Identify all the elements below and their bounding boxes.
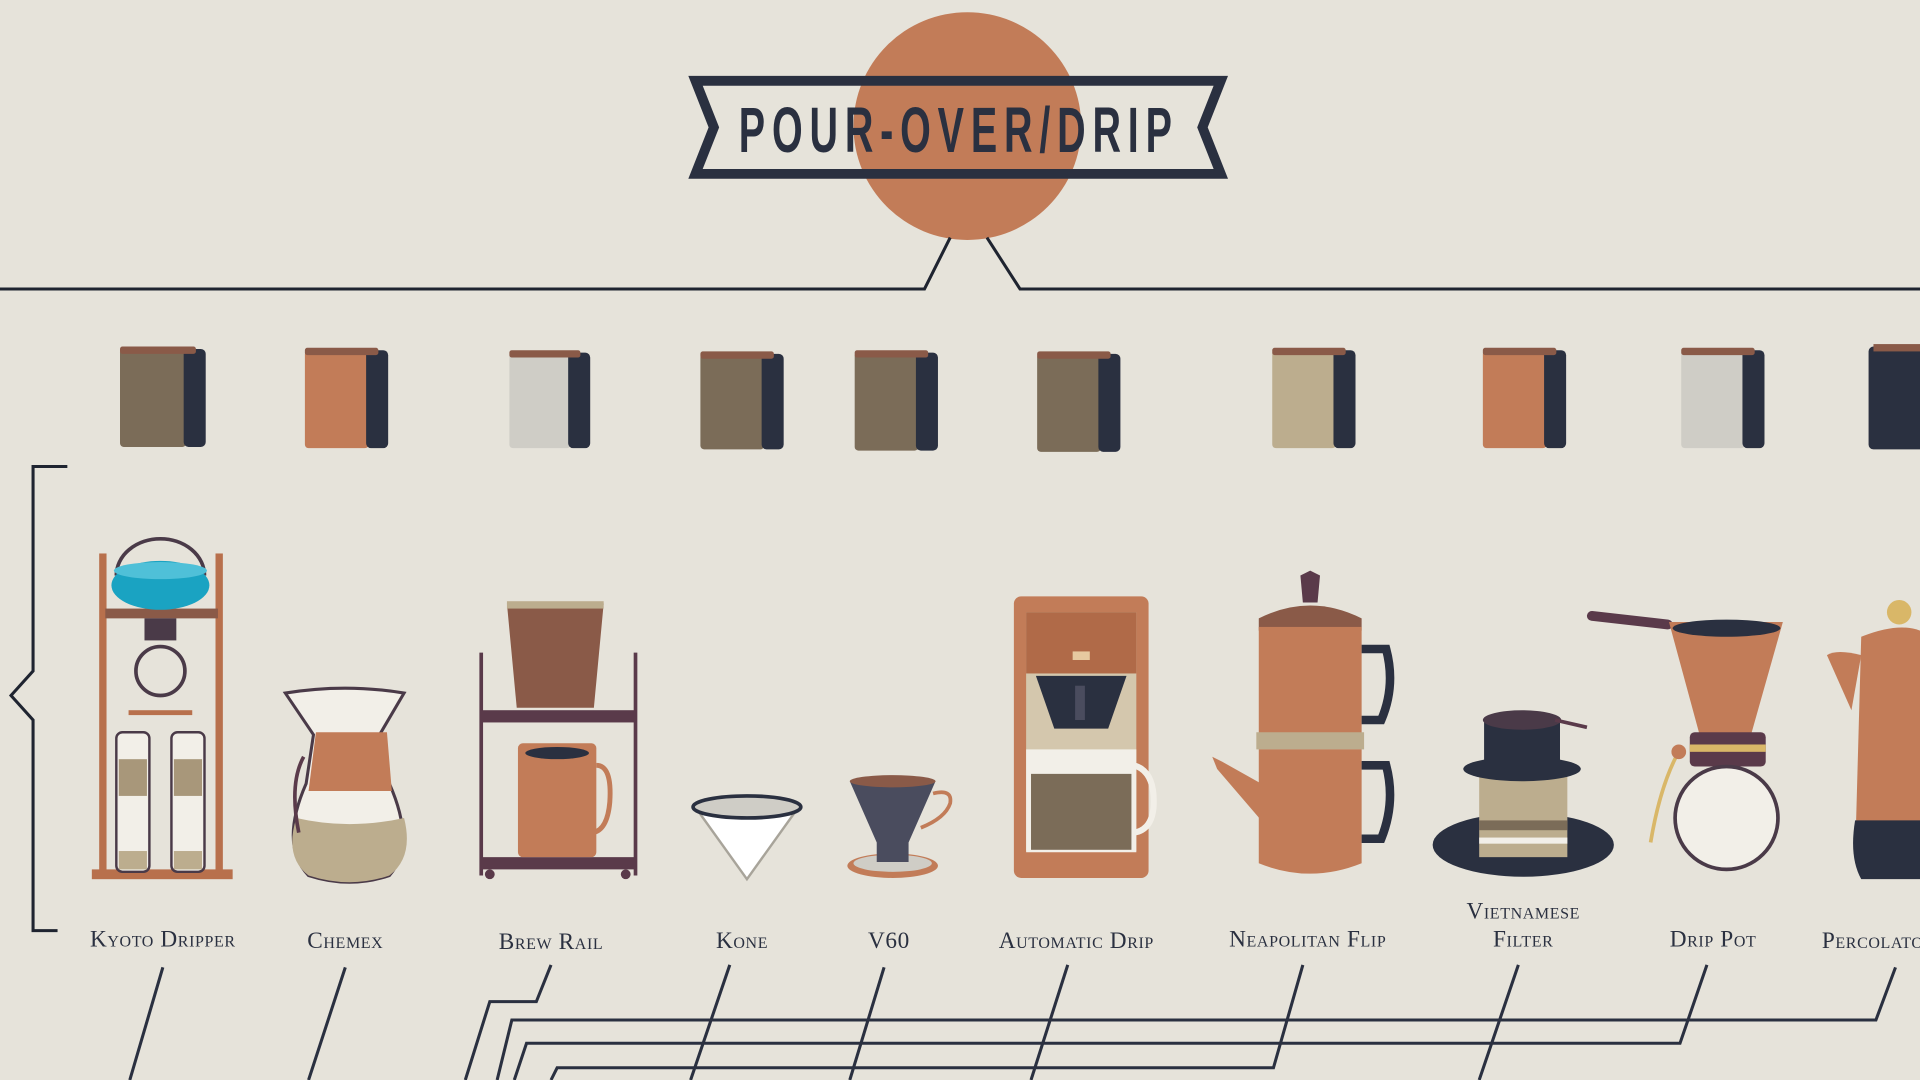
labels: V60 <box>868 928 910 954</box>
device: automatic drip <box>1014 596 1154 878</box>
bracket <box>11 467 67 931</box>
labels: Automatic Drip <box>999 928 1154 954</box>
labels: Neapolitan Flip <box>1229 927 1386 953</box>
device: brew rail <box>481 601 636 879</box>
connector lines from title <box>0 238 1920 289</box>
labels: Kyoto Dripper <box>90 927 236 953</box>
coffee bags <box>120 344 1920 452</box>
device: kyoto dripper <box>92 539 233 879</box>
connector lines bottom <box>130 965 1896 1080</box>
labels: Brew Rail <box>499 929 603 955</box>
labels: Vietnamese <box>1466 898 1580 924</box>
device: drip pot <box>1592 616 1783 869</box>
title <box>696 12 1221 240</box>
device: neapolitan flip <box>1212 571 1390 874</box>
device: percolator (partial) <box>1827 600 1920 879</box>
labels: Chemex <box>307 928 383 954</box>
device: v60 <box>847 775 950 878</box>
labels: Drip Pot <box>1670 927 1756 953</box>
labels: Filter <box>1493 927 1553 953</box>
device: vietnamese filter <box>1433 710 1614 877</box>
labels: Kone <box>716 928 768 954</box>
labels <box>90 898 1920 955</box>
device: kone <box>693 796 801 879</box>
device: chemex <box>285 688 407 882</box>
title: POUR-OVER/DRIP <box>739 95 1179 166</box>
